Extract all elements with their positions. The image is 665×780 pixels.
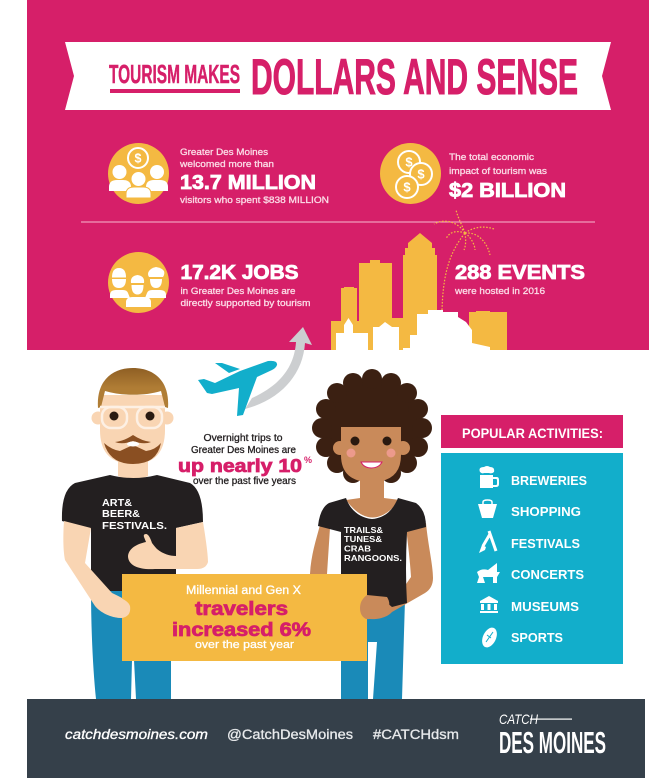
footer logo: CATCH: [499, 711, 539, 727]
text block: jobs: in Greater Des Moines are: [180, 286, 296, 297]
man left arm: [63, 521, 130, 618]
panel: yellow sign: over the past year: [195, 639, 294, 651]
woman shirt text: TRAILS&: [344, 525, 383, 535]
woman shirt text: RANGOONS.: [344, 553, 402, 563]
text block: visitors: [179, 147, 329, 206]
title: tourism makes: TOURISM MAKES: [109, 59, 240, 89]
woman smile: [361, 462, 382, 468]
activity: museums: MUSEUMS: [511, 599, 579, 614]
woman hand on sign: [360, 595, 389, 619]
woman shirt: [318, 498, 426, 607]
panel: yellow sign: increased 6%: [172, 619, 311, 641]
activity: breweries: BREWERIES: [511, 473, 587, 488]
activity: festivals: FESTIVALS: [511, 536, 580, 551]
text block: visitors: welcomed more than: [179, 159, 274, 170]
woman face: [341, 427, 401, 482]
woman jeans: [341, 600, 405, 699]
text block: economic impact: $2 BILLION: [449, 180, 566, 202]
man shirt: [62, 475, 203, 591]
text block: visitors: 13.7 MILLION: [180, 172, 316, 194]
text block: economic impact: The total economic: [449, 152, 534, 163]
text block: overnight trips: Overnight trips to: [204, 433, 283, 444]
activity: breweries: [480, 466, 587, 488]
panel: popular activities list: [441, 453, 623, 664]
text block: events: were hosted in 2016: [454, 286, 545, 297]
text block: visitors: Greater Des Moines: [180, 147, 268, 158]
activity: shopping: [478, 500, 581, 519]
activity: concerts: [477, 563, 584, 583]
footer hashtag: #CATCHdsm: [373, 727, 459, 742]
icon: airplane: [198, 361, 277, 416]
woman arms: [310, 523, 433, 619]
man hand on sign: [100, 595, 130, 618]
man ears: [92, 412, 104, 424]
text block: overnight trips: [178, 433, 312, 487]
text block: jobs: [180, 262, 311, 309]
man eyes: [110, 412, 118, 420]
footer logo: [499, 711, 606, 760]
text block: overnight trips: %: [304, 455, 312, 465]
woman ears: [333, 441, 347, 455]
man beard: [104, 443, 161, 464]
illustration: woman: [310, 369, 433, 699]
man moustache: [115, 435, 151, 443]
activity: sports: [479, 625, 563, 650]
man shirt text: ART&: [102, 497, 132, 509]
text block: visitors: visitors who spent $838 MILLION: [180, 195, 329, 206]
activity: concerts: CONCERTS: [511, 567, 584, 582]
activity: sports: SPORTS: [511, 630, 563, 645]
man shirt text: FESTIVALS.: [102, 520, 167, 532]
activity: shopping: SHOPPING: [511, 504, 581, 519]
icon: stacked coins: [380, 143, 441, 204]
text block: jobs: 17.2K JOBS: [180, 262, 298, 284]
man face: [100, 395, 165, 464]
footer handle: @CatchDesMoines: [227, 727, 353, 742]
woman cheeks: [346, 448, 356, 458]
panel: pink header background: [27, 0, 649, 350]
footer website: catchdesmoines.com: [65, 727, 208, 742]
panel: popular activities heading: POPULAR ACTIVITIES:: [462, 426, 603, 441]
panel: yellow sign: Millennial and Gen X: [186, 585, 301, 597]
text block: events: [454, 262, 585, 297]
panel: footer: [27, 699, 645, 778]
man right arm and thumb: [128, 522, 208, 569]
text block: events: 288 EVENTS: [455, 262, 585, 284]
icon: visitors with coin: [108, 143, 169, 204]
woman shirt text: CRAB: [344, 544, 371, 554]
panel: yellow sign: [122, 574, 367, 661]
illustration: city skyline: [331, 233, 507, 350]
text block: jobs: directly supported by tourism: [180, 298, 311, 309]
icon: stacked coins: $: [405, 154, 413, 170]
text block: economic impact: impact of tourism was: [449, 166, 547, 177]
woman shirt text: [344, 525, 402, 563]
text block: overnight trips: up nearly 10: [178, 455, 302, 476]
icon: workers: [108, 252, 169, 313]
text block: economic impact: [449, 152, 566, 202]
man jeans: [91, 588, 171, 699]
title underline: [110, 89, 240, 93]
man hair: [98, 368, 168, 408]
activity: festivals: [479, 531, 580, 553]
man glasses: [100, 407, 165, 428]
illustration: fireworks: [434, 210, 494, 310]
man shirt text: BEER&: [102, 508, 140, 520]
icon: stacked coins: $: [417, 166, 425, 182]
panel: popular activities heading: [441, 415, 623, 448]
illustration: man: [62, 368, 208, 699]
text block: overnight trips: Greater Des Moines are: [191, 445, 296, 456]
icon: stacked coins: $: [403, 180, 411, 194]
woman eyes: [350, 436, 360, 446]
title banner: [65, 42, 611, 110]
panel: yellow sign: travelers: [195, 598, 288, 620]
woman neck: [346, 470, 400, 518]
woman shirt text: TUNES&: [344, 534, 382, 544]
icon: visitors with coin: $: [135, 152, 142, 166]
man neck: [118, 455, 148, 480]
arrow: flight path: [245, 327, 312, 409]
text block: overnight trips: over the past five years: [193, 476, 296, 487]
woman hair: [312, 369, 432, 487]
activity: museums: [480, 596, 579, 614]
man shirt text: [102, 497, 167, 532]
